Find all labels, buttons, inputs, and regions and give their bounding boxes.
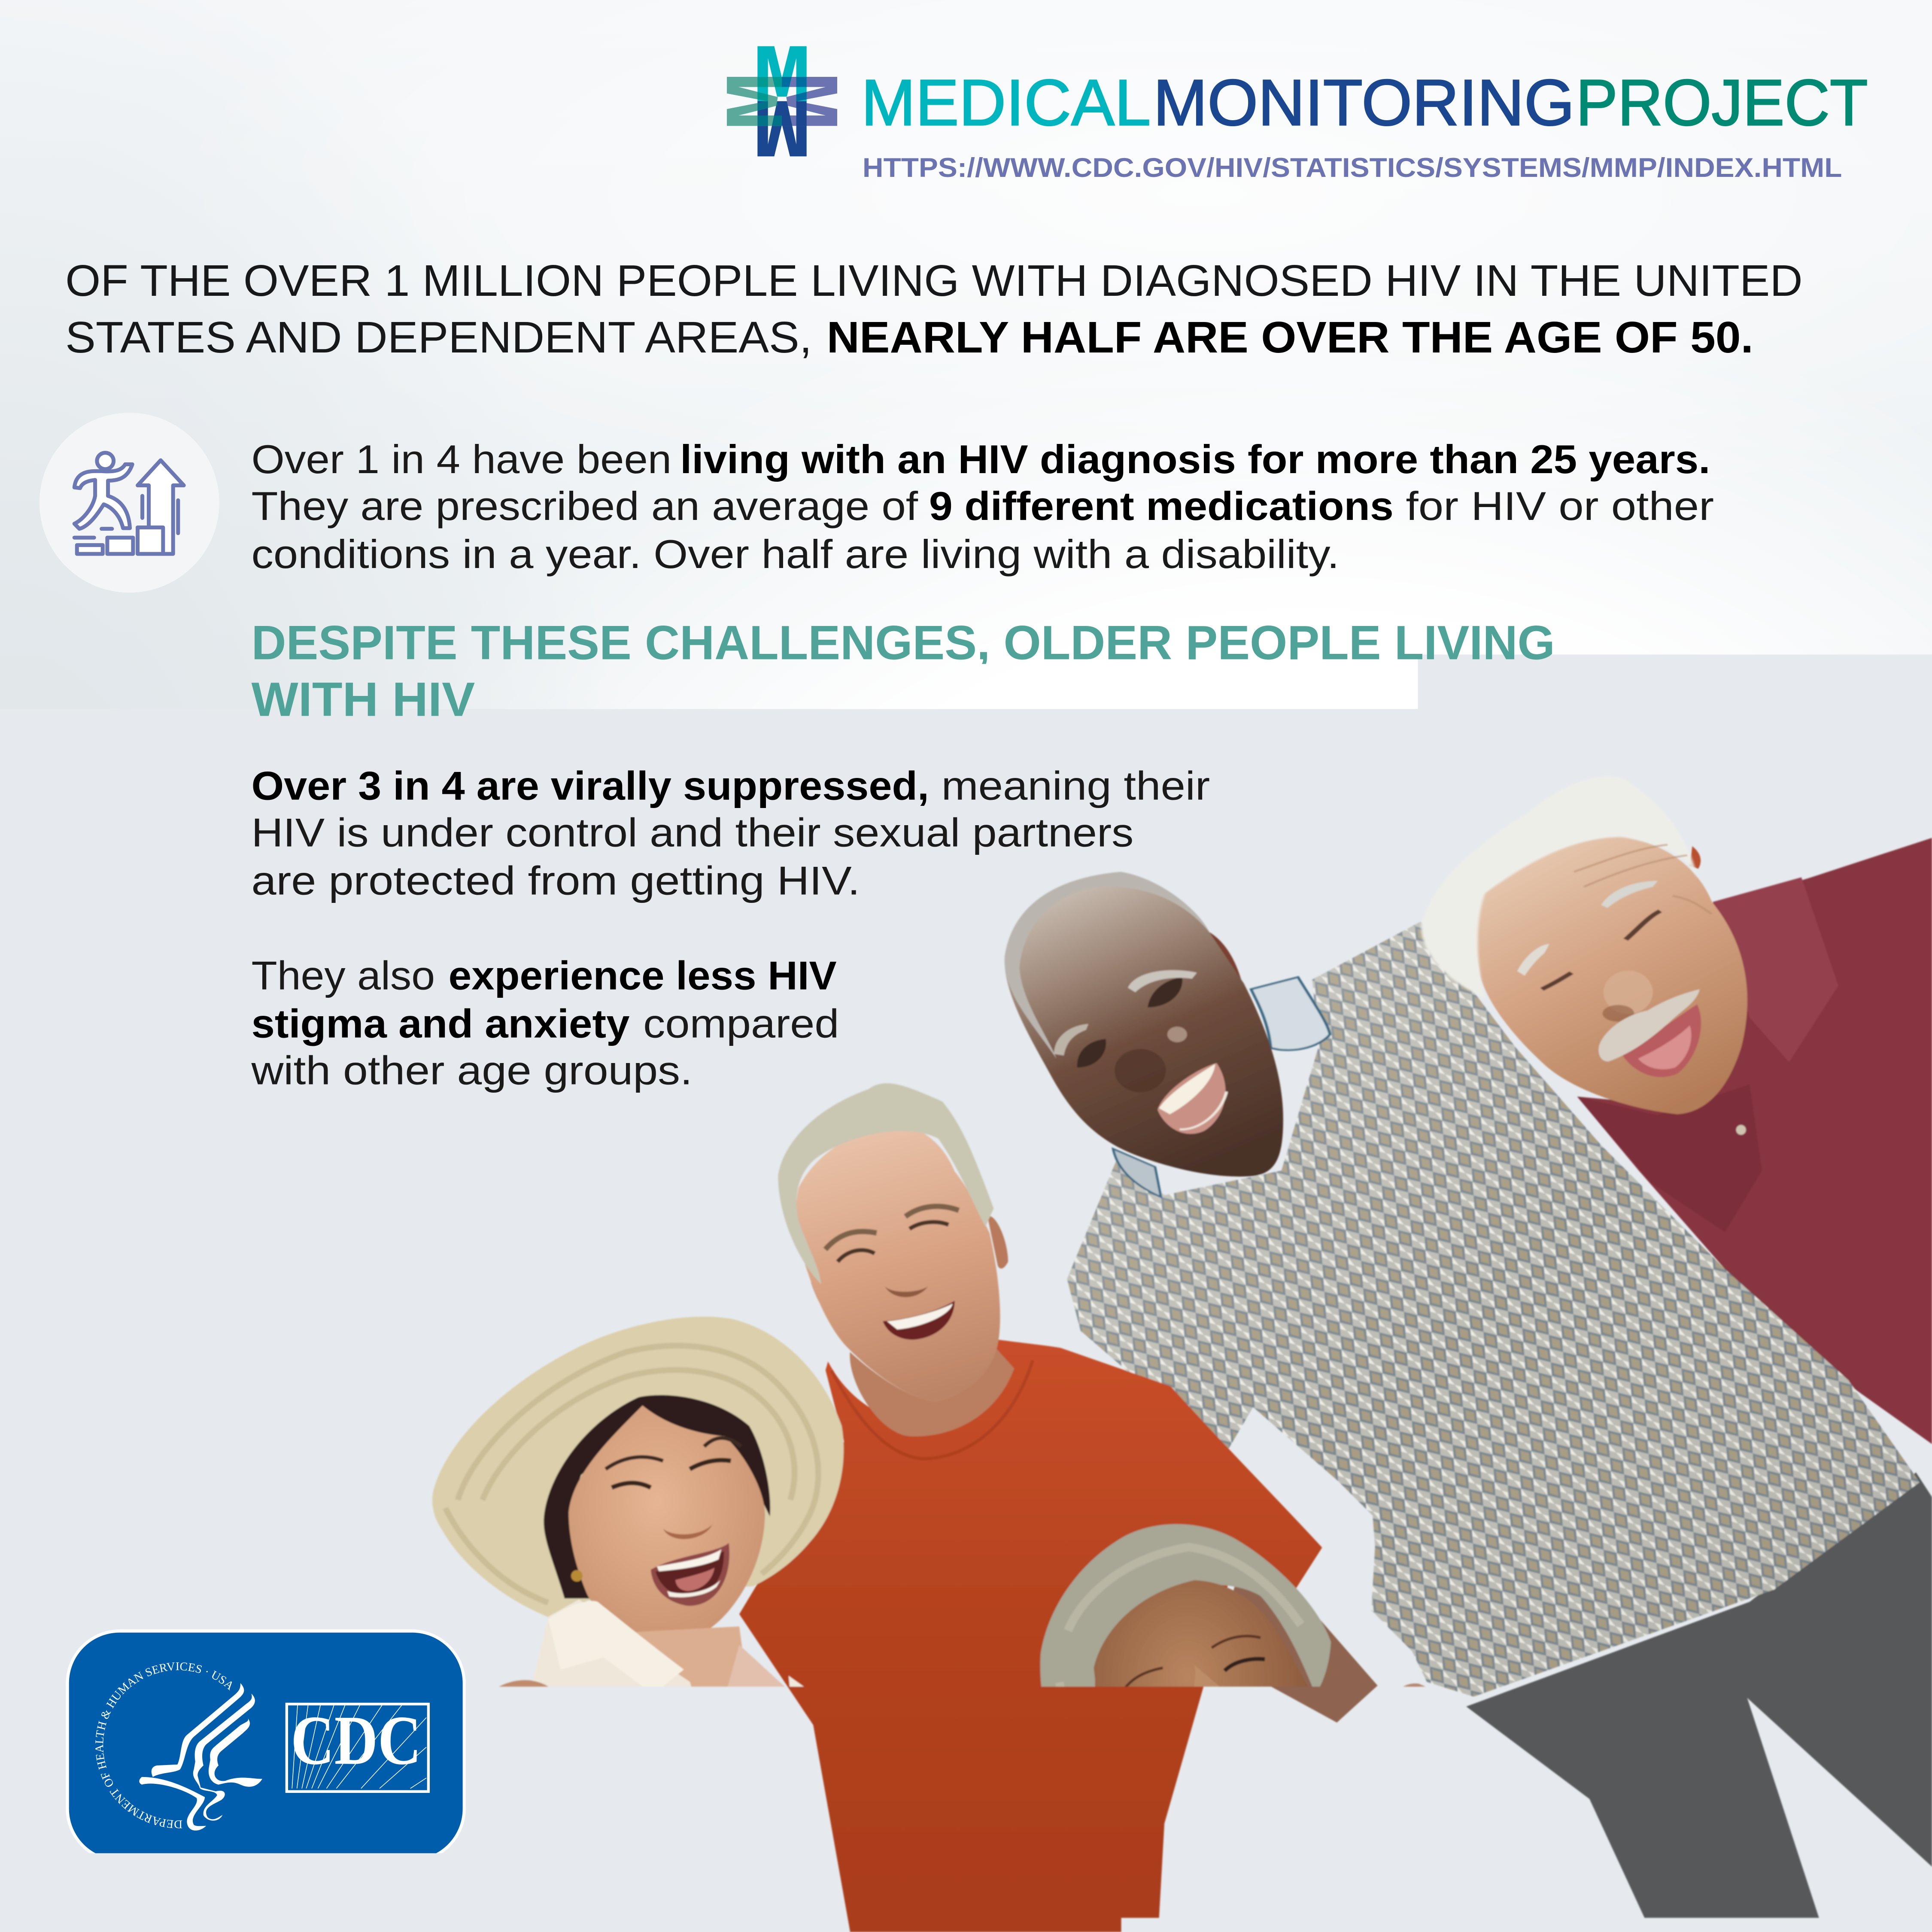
- icon: flexed arm: [39, 743, 219, 923]
- photo: four laughing older adults: [432, 776, 1932, 1932]
- man in maroon polo: shirt: [1577, 838, 1932, 1444]
- intro paragraph: living with an HIV diagnosis for more than 25 years.: [680, 437, 1710, 482]
- HHS seal: DEPARTMENT OF HEALTH & HUMAN SERVICES · USA: [92, 1659, 237, 1831]
- paragraph: less stigma: stigma and anxiety: [251, 1001, 630, 1046]
- trousers: [1466, 1473, 1932, 1932]
- man in maroon polo: head: [1421, 776, 1747, 1114]
- headline: [65, 255, 1803, 362]
- woman in yellow cardigan: cardigan: [1124, 1710, 1678, 1932]
- man's hand on woman's shoulder in cardigan: [1356, 1683, 1493, 1747]
- paragraph: virally suppressed: Over 3 in 4 are virally suppressed,: [251, 764, 929, 808]
- paragraph: virally suppressed: HIV is under control and their sexual partners: [251, 811, 1133, 855]
- intro paragraph: for HIV or other: [1406, 484, 1714, 529]
- url: HTTPS://WWW.CDC.GOV/HIV/STATISTICS/SYSTEMS/MMP/INDEX.HTML: [863, 153, 1842, 183]
- man in patterned shirt: head: [1005, 872, 1330, 1197]
- headline: STATES AND DEPENDENT AREAS,: [65, 312, 812, 362]
- paragraph: virally suppressed: meaning their: [942, 764, 1210, 808]
- paragraph: less stigma: They also: [251, 954, 435, 998]
- logo: Medical Monitoring Project mark: [727, 46, 837, 156]
- woman in yellow cardigan: head, neck and collar: [1040, 1524, 1430, 1932]
- logo wordmark: PROJECT: [1576, 66, 1868, 139]
- icon: person climbing steps with arrow: [39, 413, 219, 592]
- intro paragraph: Over 1 in 4 have been: [251, 437, 671, 482]
- man's hand on woman's shoulder: [465, 1680, 608, 1908]
- woman in hat: hat and face: [432, 1317, 844, 1646]
- subheading: [251, 616, 1555, 726]
- logo wordmark: [861, 66, 1868, 139]
- intro paragraph: [251, 437, 1714, 577]
- man in red shirt: shirt and arm: [739, 1340, 1378, 1932]
- man in red shirt: head: [778, 1083, 1033, 1459]
- publication number: 306543-A: [347, 1879, 436, 1899]
- intro paragraph: 9 different medications: [929, 484, 1394, 529]
- woman in hat: blouse and top: [459, 1599, 853, 1932]
- subheading: WITH HIV ARE RESILIENT.: [251, 672, 874, 726]
- paragraph: less stigma: [251, 954, 839, 1093]
- logo panel: HHS and CDC: [66, 1629, 466, 1862]
- intro paragraph: conditions in a year. Over half are living with a disability.: [251, 532, 1340, 577]
- paragraph: less stigma: compared: [643, 1001, 839, 1046]
- headline: NEARLY HALF ARE OVER THE AGE OF 50.: [827, 312, 1753, 362]
- headline: OF THE OVER 1 MILLION PEOPLE LIVING WITH DIAGNOSED HIV IN THE UNITED: [65, 255, 1803, 305]
- paragraph: less stigma: experience less HIV: [449, 954, 837, 998]
- logo wordmark: MEDICAL: [861, 66, 1151, 139]
- man in patterned shirt: shirt: [1067, 922, 1920, 1697]
- subheading: DESPITE THESE CHALLENGES, OLDER PEOPLE LIVING: [251, 616, 1555, 669]
- logo wordmark: MONITORING: [1153, 66, 1575, 139]
- paragraph: less stigma: with other age groups.: [251, 1048, 693, 1093]
- paragraph: virally suppressed: [251, 764, 1210, 903]
- CDC logo: CDC: [291, 1701, 422, 1779]
- paragraph: virally suppressed: are protected from getting HIV.: [251, 859, 860, 903]
- intro paragraph: They are prescribed an average of: [251, 484, 918, 529]
